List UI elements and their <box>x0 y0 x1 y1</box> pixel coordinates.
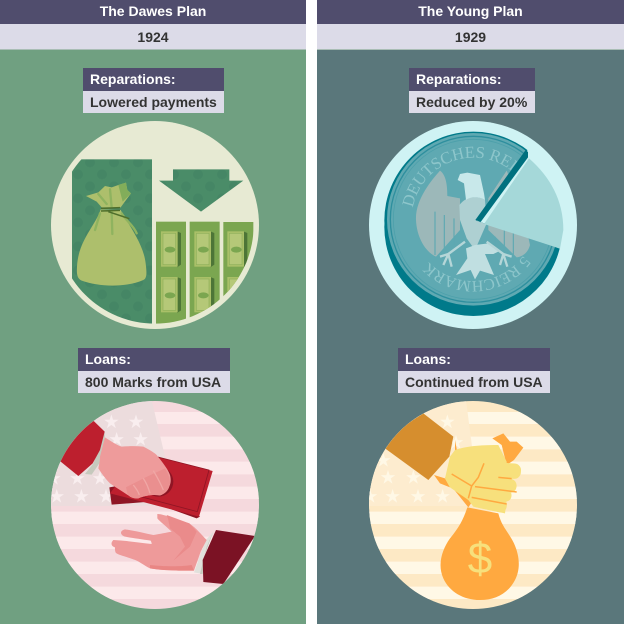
icon: down arrow <box>159 169 243 212</box>
year: 1929 <box>317 24 624 50</box>
label: loans 800 marks <box>78 348 230 393</box>
flag canton: ★ <box>98 487 114 508</box>
illustration: money bag and falling banknotes <box>51 121 259 329</box>
icon: red banknotes <box>109 455 213 518</box>
flag canton: ★ <box>73 487 90 508</box>
heading: The Dawes Plan <box>0 0 306 24</box>
label: reparations reduced by 20%: Reduced by 20% <box>416 94 527 110</box>
label: reparations reduced by 20% <box>409 68 535 113</box>
panel: The Dawes Plan <box>0 0 306 624</box>
flag canton: ★ <box>448 433 464 454</box>
heading: The Dawes Plan: The Dawes Plan <box>100 3 206 19</box>
label: loans continued from USA: Loans: <box>405 351 451 367</box>
flag canton: ★ <box>108 429 125 450</box>
icon: lower sleeve and open hand <box>112 514 255 584</box>
icon: sleeve and fist <box>385 413 521 514</box>
label: loans continued from USA <box>398 348 550 393</box>
coin inscription: DEUTSCHES REICH <box>402 146 518 208</box>
icon: money bag <box>77 183 146 286</box>
icon: money bag with dollar sign: $ <box>468 534 492 583</box>
label: loans 800 marks: Loans: <box>85 351 131 367</box>
year: 1924: 1924 <box>137 29 169 45</box>
illustration: hand passing money to another hand <box>51 401 259 609</box>
flag canton: ★ <box>439 412 456 433</box>
icon: coin: 5 REICHMARK <box>422 256 530 292</box>
icon: removed slice <box>484 158 563 249</box>
flag canton: ★ <box>48 487 65 508</box>
icon: banknote columns <box>156 222 253 332</box>
label: loans continued from USA: Continued from USA <box>405 374 543 390</box>
year: 1929: 1929 <box>455 29 486 45</box>
label: reparations lowered payments <box>83 68 224 113</box>
flag canton <box>51 401 165 506</box>
icon: money bag with dollar sign <box>441 433 523 600</box>
flag canton: ★ <box>362 487 378 508</box>
label: loans 800 marks: 800 Marks from USA <box>85 374 221 390</box>
flag canton <box>369 401 472 506</box>
year: 1924 <box>0 24 306 50</box>
icon: eagle <box>416 171 530 279</box>
flag canton: ★ <box>69 469 86 490</box>
heading: The Young Plan <box>317 0 624 24</box>
flag canton: ★ <box>405 467 422 488</box>
heading: The Young Plan: The Young Plan <box>418 3 523 19</box>
label: reparations lowered payments: Reparations: <box>90 71 176 87</box>
icon: upper sleeve and hand <box>57 421 173 499</box>
icon: coin <box>384 132 560 316</box>
label: reparations reduced by 20%: Reparations: <box>416 71 502 87</box>
flag canton: ★ <box>103 412 120 433</box>
flag canton: ★ <box>410 487 426 508</box>
illustration: fist holding dollar money bag <box>369 401 577 609</box>
flag canton: ★ <box>45 469 62 490</box>
flag canton: ★ <box>434 487 451 508</box>
flag canton: ★ <box>384 487 401 508</box>
flag canton: ★ <box>380 467 396 488</box>
flag canton: ★ <box>92 469 108 490</box>
label: reparations lowered payments: Lowered payments <box>90 94 217 110</box>
flag canton: ★ <box>375 451 392 472</box>
flag canton: ★ <box>132 429 149 450</box>
panel: The Young Plan <box>317 0 624 624</box>
flag canton: ★ <box>128 412 144 433</box>
illustration: reichsmark coin with slice removed <box>369 121 577 329</box>
